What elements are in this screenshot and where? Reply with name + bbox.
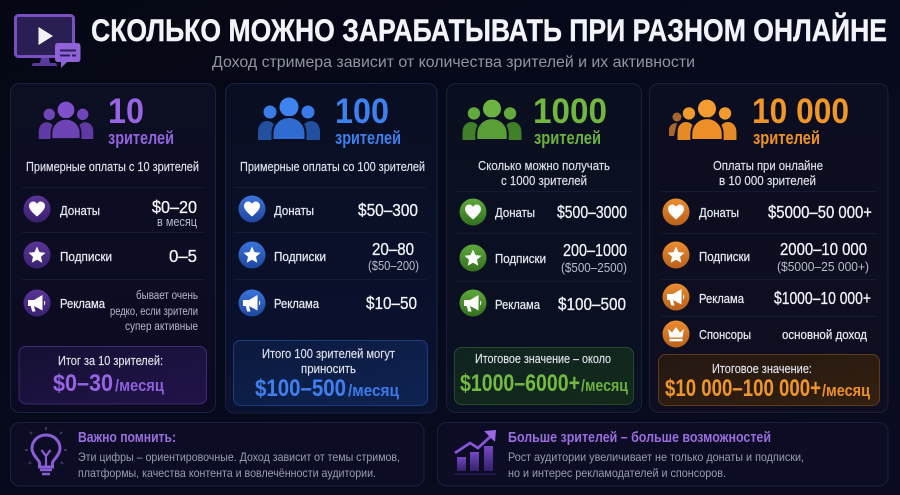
row: subscriptions: Подписки xyxy=(60,249,112,264)
row: subscriptions: ($5000–25 000+) xyxy=(777,260,869,274)
total box: Итоговое значение – около xyxy=(475,351,611,366)
total box xyxy=(658,354,880,406)
total box xyxy=(19,346,206,404)
icon: people green xyxy=(463,100,521,140)
viewer label: зрителей xyxy=(753,128,820,148)
row: ads: супер активные xyxy=(125,321,198,333)
card subtitle xyxy=(713,158,823,188)
row: sponsors: Спонсоры xyxy=(699,327,751,342)
panel: 10 000 viewers xyxy=(650,84,888,412)
viewer count: 10 xyxy=(108,92,144,131)
icon: lightbulb xyxy=(25,427,67,474)
row: subscriptions: 2000–10 000 xyxy=(780,239,867,259)
row: ads: бывает очень xyxy=(136,290,198,302)
icon: monitor with play button and chat bubble xyxy=(16,16,80,68)
panel: 1000 viewers xyxy=(446,84,642,412)
total box: /месяц xyxy=(348,381,399,400)
viewer label: зрителей xyxy=(108,128,174,148)
row: sponsors xyxy=(662,320,867,348)
total box: $0–30 xyxy=(53,370,113,397)
total box: $100–500 xyxy=(255,375,346,402)
total box: $10 000–100 000+ xyxy=(665,375,821,402)
row: subscriptions xyxy=(24,242,197,268)
row: donations: Донаты xyxy=(60,203,100,218)
row: ads xyxy=(460,290,626,316)
icon: people blue xyxy=(258,98,320,140)
row: subscriptions: ($50–200) xyxy=(368,259,419,273)
note heading: Больше зрителей – больше возможностей xyxy=(508,429,771,446)
row: subscriptions xyxy=(238,239,419,273)
row: donations: Донаты xyxy=(699,205,739,220)
card subtitle: Сколько можно получать xyxy=(478,158,610,173)
icon: people orange xyxy=(669,100,736,140)
subtitle: Доход стримера зависит от количества зрителей и их активности xyxy=(212,54,695,71)
card subtitle: Примерные оплаты с 10 зрителей xyxy=(26,159,199,174)
card subtitle: с 1000 зрителей xyxy=(501,173,587,188)
card subtitle: в 10 000 зрителей xyxy=(719,173,816,188)
note text xyxy=(78,450,400,480)
viewer label: зрителей xyxy=(335,128,401,148)
note heading: Важно помнить: xyxy=(78,429,176,446)
icon: growth chart xyxy=(454,430,496,475)
row: donations: $5000–50 000+ xyxy=(768,202,872,222)
row: subscriptions xyxy=(662,239,869,274)
panel: important note xyxy=(10,422,424,486)
row: donations xyxy=(460,198,627,226)
row: sponsors: основной доход xyxy=(782,327,867,342)
panel: more viewers xyxy=(438,422,888,486)
row: ads xyxy=(24,290,198,333)
total box: Итоговое значение: xyxy=(712,361,812,376)
row: donations: Донаты xyxy=(274,203,314,218)
row: ads: редко, если зрители xyxy=(110,306,198,318)
row: ads: $1000–10 000+ xyxy=(774,288,871,308)
viewer count: 10 000 xyxy=(752,92,849,131)
row: subscriptions: ($500–2500) xyxy=(561,261,627,275)
total box: /месяц xyxy=(822,381,870,400)
card subtitle: Примерные оплаты со 100 зрителей xyxy=(240,159,425,174)
row: donations xyxy=(662,198,872,226)
note text xyxy=(508,450,804,480)
total box: /месяц xyxy=(115,376,164,395)
row: donations xyxy=(24,196,197,229)
card subtitle xyxy=(478,158,610,188)
row: donations: $50–300 xyxy=(358,200,418,220)
total box: Итого 100 зрителей могут xyxy=(262,346,395,361)
total box xyxy=(454,348,634,404)
row: donations: $500–3000 xyxy=(557,202,627,222)
row: subscriptions: 0–5 xyxy=(169,246,197,266)
row: ads xyxy=(662,284,871,310)
viewer label: зрителей xyxy=(534,128,601,148)
note text: Эти цифры – ориентировочные. Доход зависит от темы стримов, xyxy=(78,450,400,464)
total box: /месяц xyxy=(581,376,628,395)
row: ads: Реклама xyxy=(699,291,745,306)
viewer count: 100 xyxy=(335,92,389,131)
icon: people purple xyxy=(39,102,93,139)
row: subscriptions: 200–1000 xyxy=(563,240,627,260)
row: ads: Реклама xyxy=(495,297,541,312)
viewer count: 1000 xyxy=(533,92,607,131)
card subtitle: Оплаты при онлайне xyxy=(713,158,823,173)
total box xyxy=(234,340,428,406)
note text: но и интерес рекламодателей и спонсоров. xyxy=(508,466,726,480)
row: donations: Донаты xyxy=(495,205,535,220)
row: subscriptions: 20–80 xyxy=(372,239,414,259)
panel: 10 viewers xyxy=(10,84,216,412)
row: ads: Реклама xyxy=(274,296,320,311)
note text: Рост аудитории увеличивает не только донаты и подписки, xyxy=(508,450,804,464)
total box: Итог за 10 зрителей: xyxy=(58,353,163,368)
row: ads: $100–500 xyxy=(558,294,626,314)
row: subscriptions: Подписки xyxy=(274,249,326,264)
row: ads: Реклама xyxy=(60,296,106,311)
row: subscriptions xyxy=(460,240,627,275)
row: subscriptions: Подписки xyxy=(495,251,546,266)
panel: 100 viewers xyxy=(226,84,437,413)
row: donations: в месяц xyxy=(157,215,197,229)
row: donations xyxy=(238,196,418,222)
row: ads: $10–50 xyxy=(366,293,417,313)
row: ads xyxy=(238,290,417,316)
row: subscriptions: Подписки xyxy=(699,249,750,264)
row: donations: $0–20 xyxy=(152,197,197,217)
note text: платформы, качества контента и вовлечённости аудитории. xyxy=(78,466,376,480)
total box: $1000–6000+ xyxy=(460,370,580,397)
total box: приносить xyxy=(301,361,356,376)
